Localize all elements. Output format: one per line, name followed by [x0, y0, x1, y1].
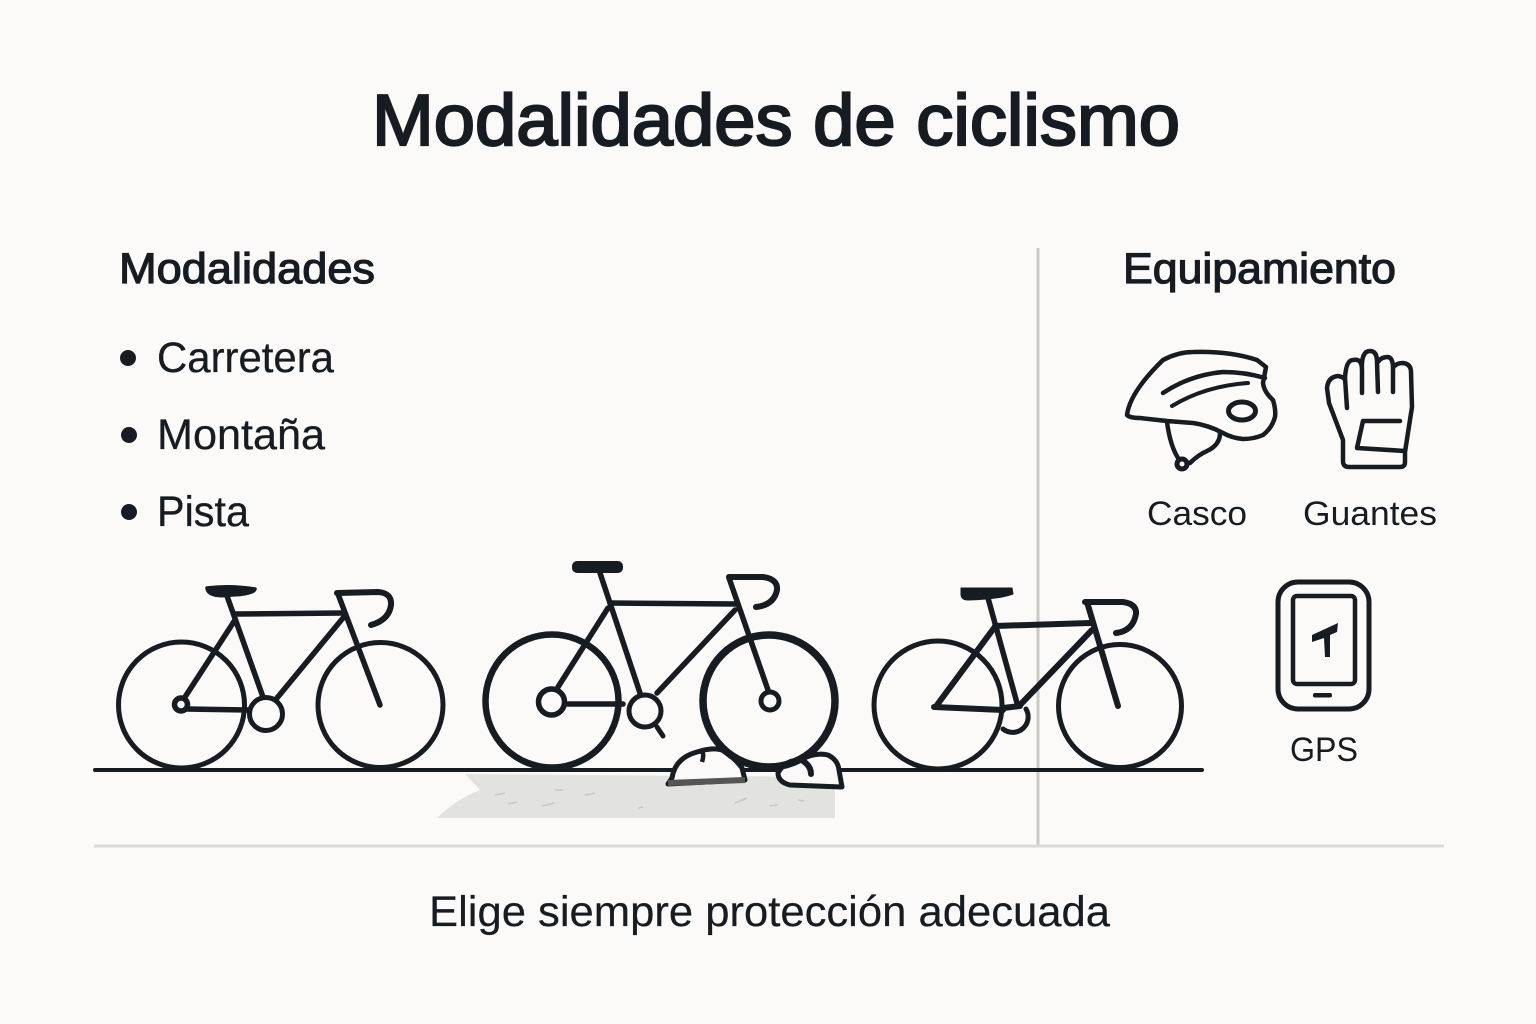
- icon: helmet: [1127, 352, 1275, 469]
- icon: left shoe: [668, 749, 745, 784]
- list item: carretera: Carretera: [157, 334, 334, 382]
- icon: glove: [1327, 351, 1412, 467]
- title: Modalidades de ciclismo: [372, 81, 1180, 161]
- label: guantes: Guantes: [1303, 495, 1437, 533]
- heading: modalidades: Modalidades: [119, 245, 375, 293]
- bicycle 2: [486, 561, 835, 768]
- label: gps: GPS: [1290, 731, 1358, 769]
- list item: montaña: Montaña: [157, 411, 325, 459]
- horizontal divider: [94, 844, 1444, 848]
- rider shoes: [668, 749, 842, 787]
- label: casco: Casco: [1147, 495, 1247, 533]
- panel: modalidades: [119, 245, 375, 536]
- bicycle 1: [118, 587, 443, 768]
- icon: right shoe: [778, 754, 842, 787]
- vertical divider: [1036, 248, 1040, 845]
- list item: pista: Pista: [157, 488, 249, 536]
- icon: gps device: [1278, 582, 1369, 709]
- ground line: [95, 768, 1202, 772]
- bicycle 3: [874, 588, 1182, 769]
- gravel patch: [437, 774, 835, 818]
- heading: equipamiento: Equipamiento: [1123, 245, 1396, 293]
- footer note: Elige siempre protección adecuada: [429, 888, 1110, 936]
- panel: equipamiento: [1123, 245, 1437, 769]
- list item: pista: [121, 488, 249, 536]
